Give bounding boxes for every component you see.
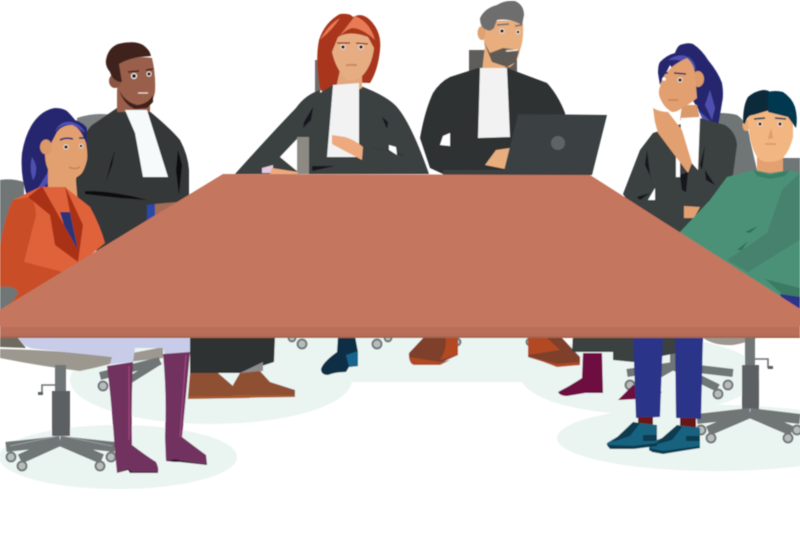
person: man on the left in robe [75,42,189,260]
person: red-haired woman in robe [235,14,429,181]
right chair lower base behind [626,350,733,398]
face [332,34,374,80]
hand raised [653,108,692,173]
bib [478,68,510,138]
right man trousers [633,336,703,419]
chair: left woman base [0,338,163,470]
other hand [684,206,700,218]
hair [743,90,770,124]
eyes [754,118,786,144]
bib [327,83,359,157]
right man socks and shoes [607,417,700,454]
neck [117,90,150,112]
robe folds [85,150,182,200]
neck [680,105,700,120]
body robe [309,85,429,174]
floor shadows [0,330,800,489]
hand on chest [332,135,363,160]
hair [22,108,87,196]
robe [420,68,570,174]
arm [235,90,325,174]
face [659,58,697,112]
hair [658,43,723,127]
table edge [0,326,800,338]
person: bearded man in robe [420,1,607,175]
left woman boots [107,352,207,473]
red-haired woman boot [321,336,358,375]
face [748,108,793,162]
hand [485,148,510,170]
bearded man shoes [409,336,580,367]
hair [480,1,524,31]
centre-left man legs and shoes [188,336,295,399]
chair backs [0,50,800,250]
white gap [648,188,655,200]
face [484,20,523,67]
laptop [443,114,607,175]
head [117,57,155,110]
neck [48,170,78,235]
right woman skirt and boots [558,336,677,400]
shirt [60,212,78,250]
eyes [662,73,686,100]
person: woman with blue hair on the right [623,43,737,280]
conference table [0,174,800,338]
person: woman with blue hair on the left [0,108,105,320]
robe [623,118,737,280]
hair highlight [320,16,375,40]
sleeve and hand [147,204,155,222]
chair back lower [0,287,18,310]
face [45,125,87,180]
eyes [497,24,522,51]
eyes [337,43,368,65]
shirt [676,117,700,177]
robe folds [303,107,405,171]
casters under table [288,334,534,348]
beard [484,42,519,67]
gap and chair [280,139,297,171]
sweater [680,170,800,325]
trousers peek [780,294,800,320]
left woman trousers [18,336,192,364]
cuff and fist [262,165,273,173]
ear left [742,119,750,131]
neck [482,45,505,72]
ear [692,71,704,87]
beard [119,90,153,109]
bib [125,110,168,177]
white gap [440,133,450,146]
hair [106,42,151,82]
ear [478,26,486,40]
hair [317,14,380,102]
eyes [128,69,153,93]
white gap near sleeve [389,145,397,155]
jacket [0,187,105,320]
right chair [696,336,800,442]
robe [75,108,189,260]
table top [0,174,800,326]
neck [757,150,783,175]
lapels [28,186,83,262]
neck [336,70,362,95]
person: man in green sweater [680,90,800,325]
eyes [60,138,84,168]
robe folds [637,145,715,200]
